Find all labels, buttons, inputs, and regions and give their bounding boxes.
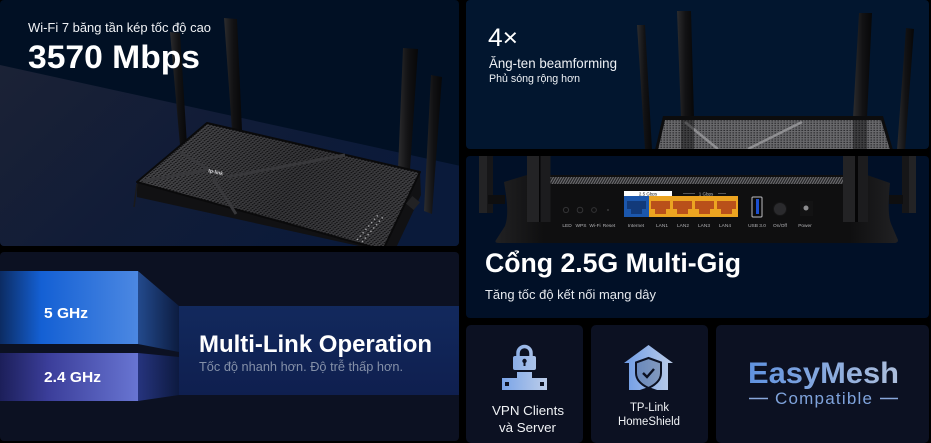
- panel: HomeShield: [591, 325, 708, 443]
- router: rear view: [479, 156, 916, 243]
- rear labels: Reset: [603, 223, 616, 229]
- rear labels: LAN1: [656, 223, 668, 229]
- router: rear view: 2.5 Gbps: [639, 192, 658, 196]
- rear labels: Wi-Fi: [589, 223, 601, 229]
- rear labels: LAN2: [677, 223, 689, 229]
- buttons: [563, 207, 596, 213]
- rear labels: Internet: [628, 223, 645, 229]
- icon: house shield: [624, 345, 673, 391]
- heading: 2.5G Multi-Gig: Cổng 2.5G Multi-Gig: [485, 248, 741, 278]
- router: angled view: [134, 18, 442, 250]
- text: wired speed: Tăng tốc độ kết nối mạng dây: [485, 287, 656, 302]
- logo: tp-link: [208, 168, 224, 177]
- stat: 4×: 4×: [488, 24, 518, 52]
- icon: VPN lock: [502, 346, 547, 390]
- panel: 2.5G port: [466, 156, 929, 318]
- band block: 2.4 GHz: [0, 353, 179, 401]
- panel: Wi-Fi 7 speed: [0, 0, 465, 250]
- rear labels: LAN3: [698, 223, 710, 229]
- router: rear view: 1 Gbps: [699, 192, 714, 196]
- band block: 5 GHz: 5 GHz: [44, 305, 88, 322]
- router: front view: [637, 11, 914, 150]
- heading: Multi-Link Operation: Multi-Link Operation: [199, 331, 432, 358]
- merged band: [179, 306, 460, 395]
- rear labels: USB 3.0: [748, 223, 766, 229]
- rear labels: LAN4: [719, 223, 731, 229]
- USB and power: [752, 197, 762, 217]
- text: faster speed: Tốc độ nhanh hơn. Độ trễ thấp hơn.: [199, 359, 403, 374]
- panel: Multi-Link Operation: [0, 252, 460, 441]
- rear labels: [562, 224, 812, 227]
- panel: VPN: và Server: [499, 420, 557, 435]
- band block: 2.4 GHz: 2.4 GHz: [44, 369, 101, 386]
- LED lights: [357, 215, 383, 242]
- heading: 3570 Mbps: 3570 Mbps: [28, 39, 200, 75]
- logo: EasyMesh: EasyMesh: [748, 357, 899, 390]
- rear labels: On/Off: [773, 223, 788, 229]
- panel: EasyMesh: [716, 325, 929, 443]
- port labels: [624, 191, 672, 196]
- panel: beamforming antennas: [466, 0, 929, 150]
- logo: Compatible: Compatible: [775, 389, 872, 408]
- subheading: Wi-Fi 7: Wi-Fi 7 băng tần kép tốc độ cao: [28, 20, 211, 35]
- panel: HomeShield: HomeShield: [618, 416, 680, 428]
- rear labels: WPS: [576, 223, 586, 229]
- label: VPN: VPN Clients: [492, 403, 565, 418]
- rear labels: Power: [798, 223, 812, 229]
- ports: internet and LAN: [624, 196, 649, 217]
- band block: 5 GHz: [0, 271, 179, 352]
- label: HomeShield: TP-Link: [630, 402, 669, 414]
- text: beamforming: Ăng-ten beamforming: [489, 55, 617, 71]
- rear labels: LED: [562, 223, 572, 229]
- panel: VPN: [466, 325, 583, 443]
- text: wider coverage: Phủ sóng rộng hơn: [489, 73, 580, 85]
